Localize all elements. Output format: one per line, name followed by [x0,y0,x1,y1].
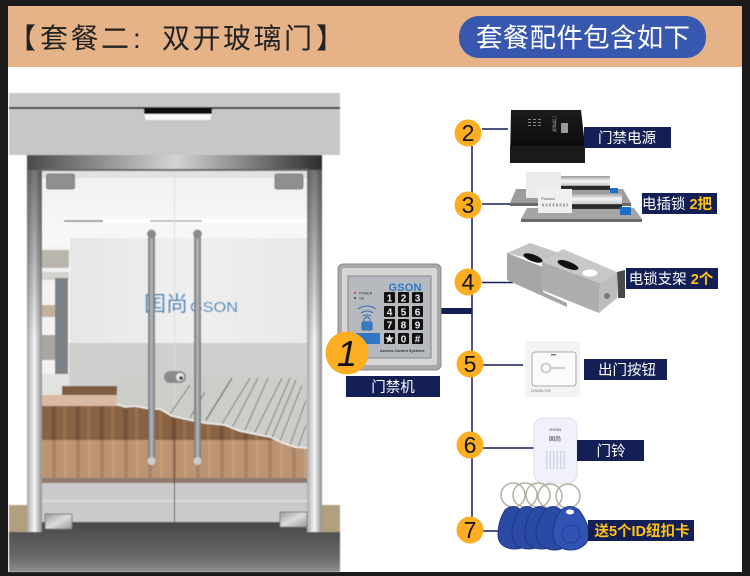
wood counter [42,386,307,483]
patch fittings [45,174,307,529]
badge 4: 4 [462,269,475,295]
floor [9,522,340,572]
icon: electric bolt locks: Product [541,196,556,201]
glass background [42,170,307,522]
title: 双开玻璃门 [162,23,315,54]
keys: 2 [401,294,407,304]
badge 5: 5 [464,351,476,377]
label: key fobs: 送5个ID纽扣卡 [594,522,690,540]
badge 1: 1 [337,333,357,374]
pill: package contents: 套餐配件包含如下 [476,23,690,53]
label: exit button [584,359,667,380]
title: 】 [316,23,344,54]
icon: exit button: GSON-702 [531,388,552,393]
icon: exit button [525,341,580,397]
label: exit button: 出门按钮 [598,362,656,379]
thick connector to keypad [441,308,472,314]
badge 7: 7 [464,517,476,543]
label: keypad: 门禁机 [371,379,415,396]
label: key fobs [588,520,694,541]
keys: ★ [384,334,394,346]
status LEDs: POWER [359,292,373,296]
keys: 3 [415,294,421,304]
torn stone overlay [117,377,307,448]
keypad device [338,264,441,370]
icon: power supply box: 门禁电源 [552,116,558,132]
icon: door bell: 囯尚 [549,435,561,443]
label: power supply: 门禁电源 [598,130,656,147]
keypad device: Access Control Systems [380,349,425,353]
status LEDs [354,292,373,300]
lower textured wall [69,343,307,407]
keypad brand: GSON [388,282,422,294]
label: keypad [346,376,440,397]
panel: double glass door photo [9,93,340,572]
logo on glass: GSON [190,299,238,316]
RFID symbol [358,306,376,330]
header banner [8,6,742,67]
keys [384,292,423,346]
connector lines [472,129,535,531]
icon: electric bolt locks [510,172,642,222]
skirting [9,505,340,532]
label: power supply [584,127,671,148]
logo on glass: 囯尚 [144,293,188,316]
keys: 6 [415,308,421,318]
title: 套餐二 [40,23,132,54]
keys: 8 [401,320,407,332]
status LEDs: OK [359,296,365,300]
label: bolt lock: 电插锁 2把 [642,196,713,213]
title: : [133,23,141,54]
icon: power supply box [510,110,585,163]
stone veins [170,378,306,447]
center floor lock [164,371,186,383]
badge 6 [456,432,484,458]
icon: door bell [534,418,577,483]
icon: lock brackets [507,243,625,313]
interior wall panel [70,238,307,343]
logo on glass [144,293,238,316]
keys: 9 [415,320,421,332]
keys: 1 [387,294,393,304]
keys: # [415,334,421,346]
badge 3 [454,192,482,218]
badge 3: 3 [462,192,474,218]
interior shelf at left [42,247,69,377]
label: bracket: 电锁支架 2个 [629,271,714,288]
label: door bell [577,440,644,461]
badge 2: 2 [462,120,474,146]
keys: 7 [387,320,393,332]
pull handles [147,230,202,465]
keys: 4 [387,308,393,318]
center seam [174,170,176,405]
keys: 5 [401,308,407,318]
badge 5 [456,350,484,378]
icon: door bell: GSON [549,427,561,432]
title: 【 [8,23,36,54]
label: door bell: 门铃 [596,443,626,460]
badge 7 [456,516,484,544]
pill: package contents [459,16,706,58]
stone white edge [117,404,307,448]
keys: 0 [401,334,407,346]
badge 1 [326,332,368,374]
icon: ID key fobs [498,483,589,550]
door header fascia [9,93,340,155]
lower glass reflection band [42,483,307,522]
badge 6: 6 [464,432,476,458]
badge 4 [454,268,482,296]
door frame [27,155,322,532]
badge 2 [454,120,482,146]
